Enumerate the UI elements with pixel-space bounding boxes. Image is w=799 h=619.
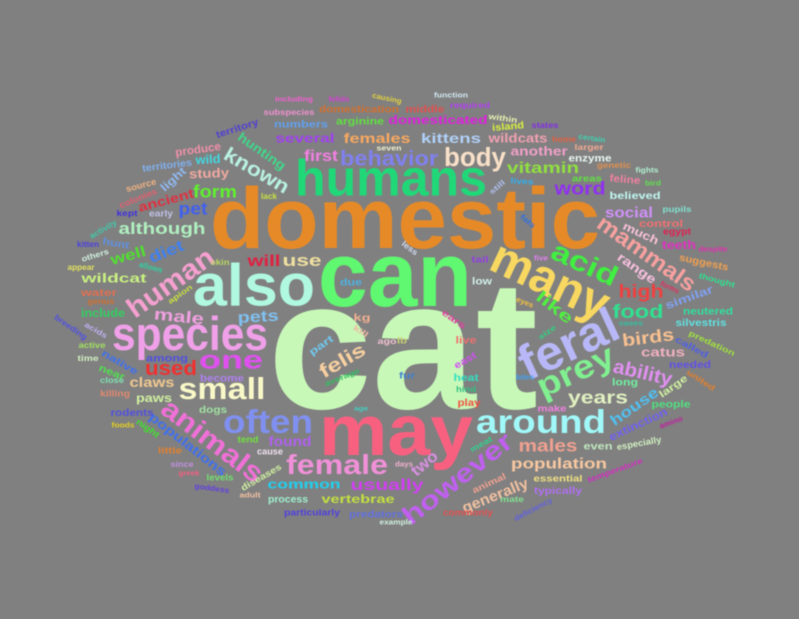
small words: right side	[500, 121, 737, 523]
small words: centre: seven	[376, 144, 402, 153]
small words: centre: subspecies	[264, 108, 315, 117]
small words: centre: east	[452, 350, 479, 372]
word: often: often	[223, 403, 313, 440]
small words: right side: eyes	[515, 295, 535, 310]
medium words: kittens	[421, 130, 481, 146]
medium words: range	[615, 250, 659, 287]
small words: centre: required	[450, 101, 490, 110]
medium words: catus	[641, 345, 685, 360]
medium words: high	[619, 281, 663, 302]
small words: left side: activity	[88, 218, 119, 241]
small words: left side: diseases	[239, 462, 283, 493]
small words: right side: suggests	[678, 252, 730, 274]
medium words: like	[532, 288, 577, 328]
small words: centre: lb	[397, 335, 408, 345]
small words: right side: believed	[610, 190, 660, 202]
word: domestic: domestic	[210, 171, 600, 267]
medium words: found	[268, 433, 312, 449]
small words: centre: commonly	[443, 507, 493, 517]
word: cat: cat	[268, 241, 538, 447]
small words: right side: thought	[698, 271, 736, 290]
small words: right side: essential	[534, 473, 582, 483]
small words: right side: large	[657, 373, 690, 401]
word: can: can	[318, 224, 472, 326]
small words: right side: people	[652, 400, 691, 411]
word: small: small	[178, 371, 266, 406]
small words: centre: due	[340, 278, 363, 289]
small words: right side: long	[612, 378, 638, 389]
small words: right side: certain	[578, 132, 606, 145]
small words: left side: source	[125, 176, 157, 194]
small words: left side: appear	[68, 263, 94, 272]
small words: right side: fats	[518, 212, 537, 230]
small words: right side: mate	[500, 495, 525, 504]
word: may: may	[319, 392, 474, 471]
word: female: female	[286, 449, 388, 480]
small words: right side: extinction	[607, 406, 670, 444]
word: also: also	[193, 252, 315, 318]
small words: left side: territories	[142, 158, 193, 175]
word: acid: acid	[546, 235, 623, 292]
small words: right side: typically	[534, 485, 582, 497]
small words: left side: genus	[88, 297, 115, 306]
small words: left side: little	[158, 445, 182, 455]
small words: centre: still	[487, 178, 507, 196]
medium words: wildcat	[80, 271, 147, 286]
small words: left side: hunt	[102, 236, 131, 252]
small words: right side: size	[536, 323, 558, 342]
medium words: pets	[237, 308, 279, 327]
medium words: males	[518, 435, 578, 455]
small words: right side: especially	[616, 434, 662, 452]
small words: right side: much	[621, 221, 660, 248]
small words: centre: animal	[471, 471, 508, 495]
word: humans: humans	[295, 149, 487, 206]
medium words: ability	[611, 356, 675, 390]
medium words: social	[605, 204, 653, 221]
small words: right side: make	[538, 403, 566, 413]
small words: right side: neutered	[683, 307, 733, 318]
small words: right side: amino	[658, 414, 684, 431]
small words: left side: time	[78, 354, 99, 363]
small words: left side: become	[200, 374, 245, 385]
small words: left side: light	[159, 165, 189, 194]
small words: left side: near	[97, 363, 126, 383]
small words: centre: less	[400, 239, 420, 258]
small words: left side: include	[81, 308, 125, 320]
medium words: known	[220, 144, 293, 199]
small words: centre: play	[458, 397, 481, 409]
small words: centre: hind	[456, 385, 476, 394]
medium words: wildcats	[487, 132, 548, 146]
word: around: around	[476, 403, 606, 440]
small words: left side: cause	[257, 446, 283, 456]
small words: right side: feline	[609, 172, 641, 187]
small words: right side: even	[584, 442, 612, 453]
small words: centre: kill	[352, 323, 370, 339]
small words: left side: killing	[100, 388, 130, 398]
medium words: domesticated	[388, 115, 488, 127]
small words: left side: wild	[194, 152, 221, 167]
small words: right side: cases	[619, 319, 643, 328]
small words: centre: causing	[371, 91, 403, 106]
small words: centre: fur	[399, 370, 416, 380]
small words: right side: needed	[669, 359, 711, 371]
small words: left side: apion	[166, 282, 195, 306]
medium words: two	[408, 448, 442, 480]
small words: centre: ears	[440, 307, 468, 331]
small words: right side: silvestris	[676, 317, 727, 329]
word: many: many	[482, 230, 618, 331]
small words: right side: home	[552, 135, 577, 144]
word: feral: feral	[510, 298, 628, 391]
small words: right side: bites	[516, 373, 534, 382]
small words: centre: island	[492, 120, 525, 134]
small words: centre: numbers	[274, 120, 329, 131]
small words: centre: including	[275, 95, 313, 104]
small words: left side: allows	[138, 260, 164, 275]
small words: left side: paws	[136, 393, 172, 405]
medium words: several	[276, 131, 334, 146]
small words: centre: predators	[349, 510, 404, 521]
small words: left side: night	[134, 417, 161, 440]
small words: right side: enzyme	[568, 154, 612, 165]
small words: left side: dogs	[199, 404, 227, 416]
small words: centre: within	[487, 112, 518, 125]
medium words: hunting	[235, 129, 289, 173]
small words: right side: control	[639, 218, 683, 230]
medium words: ancient	[137, 185, 196, 215]
small words: left side: foods	[111, 421, 135, 430]
small words: right side: despite	[698, 245, 728, 254]
medium words: will	[246, 253, 281, 270]
word: one: one	[199, 344, 263, 374]
small words: left side: tend	[238, 434, 258, 444]
small words: centre: tail	[472, 254, 488, 264]
small words: left side: produce	[175, 141, 222, 159]
medium words: birds	[621, 324, 675, 350]
small words: left side: close	[100, 376, 125, 385]
word: human: human	[120, 241, 220, 324]
medium words: study	[189, 165, 230, 181]
medium words: male	[153, 305, 205, 328]
medium words: felis	[315, 339, 370, 383]
small words: centre	[264, 91, 525, 527]
small words: left side: goddess	[194, 481, 230, 495]
small words: right side: forms	[659, 279, 681, 295]
medium words: form	[193, 181, 237, 201]
medium words: population	[511, 455, 607, 472]
medium words: diet	[147, 237, 187, 267]
medium words: pet	[178, 198, 208, 218]
medium words: another	[511, 144, 568, 158]
small words: left side: water	[80, 287, 117, 299]
small words: right side: egypt	[663, 226, 691, 236]
small words: centre: meat	[469, 434, 494, 454]
small words: right side: pupils	[662, 205, 692, 214]
small words: left side: breeding	[53, 313, 89, 342]
medium words	[80, 115, 685, 517]
small words: centre: heat	[454, 372, 479, 384]
small words: left side: native	[99, 348, 140, 378]
small words: left side: among	[146, 354, 188, 365]
small words: centre: example	[380, 518, 412, 527]
small words: centre: kg	[354, 312, 370, 324]
small words: left side: active	[78, 341, 106, 350]
small words: centre: felids	[328, 95, 350, 104]
small words: right side: states	[531, 121, 559, 130]
medium words: food	[612, 301, 664, 323]
medium words: females	[344, 130, 411, 146]
small words: right side: called	[674, 334, 710, 360]
small words: left side: lack	[261, 192, 278, 201]
small words: left side: kitten	[77, 240, 99, 249]
word: behavior: behavior	[340, 148, 438, 171]
word: prey: prey	[530, 336, 621, 404]
medium words: word	[553, 178, 606, 199]
small words: left side: skin	[210, 258, 230, 267]
medium words: generally	[460, 475, 532, 517]
medium words: well	[107, 243, 148, 269]
small words: left side: since	[170, 460, 194, 469]
small words: centre: live	[455, 336, 477, 347]
small words: right side: fights	[635, 166, 659, 175]
small words: right side: similar	[664, 284, 716, 312]
small words: right side: areas	[572, 173, 602, 183]
small words: left side: others	[80, 247, 110, 264]
medium words: use	[282, 252, 322, 270]
word: species: species	[112, 307, 268, 360]
word: however: however	[396, 426, 518, 531]
word: body: body	[444, 144, 507, 172]
medium words: common	[268, 477, 341, 492]
medium words: used	[145, 358, 197, 380]
small words: centre: low	[472, 277, 492, 288]
small words: left side: acids	[83, 320, 109, 340]
small words: right side: temperature	[586, 456, 645, 485]
small words: centre: age	[354, 405, 368, 412]
small words: left side: territory	[215, 117, 260, 141]
medium words: populations	[146, 409, 230, 479]
medium words: years	[568, 387, 628, 408]
small words: right side: five	[534, 254, 548, 263]
small words: centre: middle	[406, 105, 445, 116]
medium words: although	[118, 220, 206, 238]
medium words: usually	[350, 477, 424, 494]
small words: left side: colonies	[118, 186, 159, 210]
small words: right side: predation	[687, 329, 737, 358]
small words: left side	[53, 117, 283, 500]
small words: right side: lives	[510, 176, 534, 187]
medium words: house	[607, 384, 662, 429]
small words: centre: process	[268, 495, 308, 506]
small words: left side: adult	[239, 491, 261, 500]
small words: left side: early	[149, 208, 173, 218]
small words: centre: days	[395, 460, 413, 469]
small words: centre: arginine	[336, 117, 385, 128]
small words: left side: rodents	[110, 407, 154, 419]
small words: centre: ago	[378, 337, 397, 346]
medium words: vitamin	[507, 160, 579, 177]
small words: centre: average	[323, 366, 361, 388]
small words: left side: greek	[179, 469, 200, 478]
small words: right side: genetic	[597, 161, 632, 170]
medium words: first	[304, 148, 339, 165]
small words: centre: particularly	[284, 507, 340, 517]
small words: centre: part	[307, 333, 337, 358]
word: mammals: mammals	[592, 210, 701, 297]
small words: centre: function	[434, 91, 468, 100]
small words: right side: teeth	[662, 240, 696, 252]
small words: right side: larger	[574, 143, 604, 152]
small words: left side: kept	[116, 209, 138, 218]
medium words: vertebrae	[322, 494, 394, 506]
small words: left side: levels	[206, 472, 234, 482]
medium words: claws	[129, 374, 175, 390]
small words: right side: deficiency	[512, 495, 555, 523]
small words: centre: domestication	[319, 105, 399, 116]
word: animals: animals	[155, 392, 270, 489]
small words: right side: bird	[645, 179, 661, 188]
small words: right side: united	[685, 368, 717, 393]
